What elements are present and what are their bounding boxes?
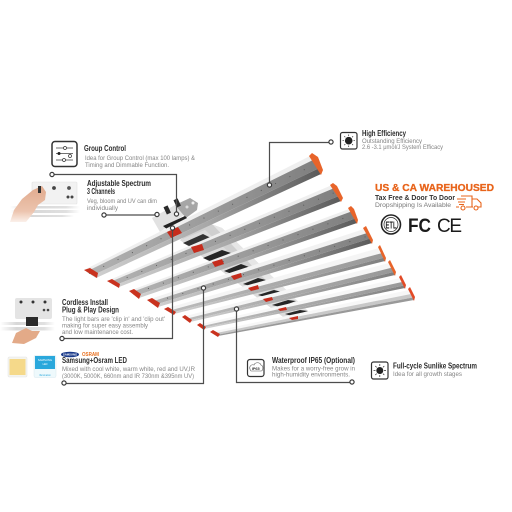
text: high efficiency: 2.6 -3.1 μmol/J System Efficacy <box>362 144 444 151</box>
text: full-cycle spectrum: Idea for all growth stages <box>393 371 463 378</box>
text: group control: Group Control <box>84 144 126 153</box>
icon: Samsung tile: LED <box>43 363 48 366</box>
icon: full-cycle sun <box>372 362 388 379</box>
logo: FCC: FC <box>408 216 431 237</box>
icon: Samsung tile: Illumination <box>39 374 52 377</box>
heading: US and CA warehoused: Dropshipping Is Available <box>375 202 451 209</box>
bar 2 <box>107 183 343 288</box>
text: samsung osram LED: (3000K, 5000K, 660nm and IR 730nm &395nm UV) <box>62 373 194 380</box>
text: high efficiency: High Efficiency <box>362 129 406 138</box>
icon: high efficiency <box>340 132 357 149</box>
text: samsung osram LED <box>62 356 195 380</box>
text: samsung osram LED: Samsung+Osram LED <box>62 356 127 365</box>
bar 1 <box>84 153 323 278</box>
text: cordless install: and low maintenance cost. <box>62 329 133 336</box>
text: group control: Timing and Dimmable Function. <box>85 162 169 169</box>
text: cordless install: Cordless Install <box>62 298 108 307</box>
image: hand on control panel <box>10 182 80 222</box>
text: adjustable spectrum: Veg, bloom and UV can dim <box>87 198 157 205</box>
LED light fixture <box>84 153 415 337</box>
icon: LED chip <box>8 357 27 377</box>
text: cordless install: Plug & Play Design <box>62 306 119 314</box>
text: waterproof: high-humidity environments. <box>272 372 350 378</box>
bar 4 <box>147 226 373 308</box>
heading: US and CA warehoused: US & CA WAREHOUSED <box>375 182 494 194</box>
icon: group control <box>52 142 77 166</box>
logo: ETL: ETL <box>386 220 396 232</box>
text: waterproof <box>272 356 355 378</box>
text: adjustable spectrum: individually <box>87 205 119 212</box>
red clips <box>167 227 298 320</box>
control box <box>152 198 198 232</box>
icon: IP65 waterproof <box>248 360 264 376</box>
bar 5 <box>164 245 386 315</box>
text: waterproof: Waterproof IP65 (Optional) <box>272 356 355 365</box>
text: waterproof: Makes for a worry-free grow in <box>272 366 355 372</box>
text: adjustable spectrum: 3 Channels <box>87 187 115 196</box>
text: adjustable spectrum: Adjustable Spectrum <box>87 179 151 188</box>
logos: Samsung and Osram: SAMSUNG <box>63 352 77 356</box>
text: full-cycle spectrum <box>393 362 477 378</box>
text: group control: Idea for Group Control (max 100 lamps) & <box>85 155 196 162</box>
text: high efficiency <box>362 129 444 151</box>
bar 6 <box>182 260 396 323</box>
bar 8 <box>210 287 415 337</box>
icon: Samsung tile: SAMSUNG <box>38 358 52 362</box>
logo: CE: CE <box>437 216 462 237</box>
bar 3 <box>129 206 358 299</box>
drivers <box>183 234 308 316</box>
icon: IP65 waterproof: IP65 <box>252 367 260 371</box>
icon: delivery truck <box>456 196 481 210</box>
text: cordless install: The light bars are 'clip in' and 'clip out' <box>62 316 165 323</box>
bar 7 <box>197 275 406 330</box>
logos: Samsung and Osram <box>61 352 99 358</box>
icon: Samsung tile <box>34 356 56 378</box>
central spine <box>180 222 312 322</box>
text: cordless install: making for super easy assembly <box>62 322 149 330</box>
text: cordless install <box>62 298 165 336</box>
logo: ETL <box>382 215 400 234</box>
text: group control <box>84 144 196 169</box>
text: adjustable spectrum <box>87 179 157 212</box>
text: samsung osram LED: Mixed with cool white, warm white, red and UV,IR <box>62 366 195 373</box>
logos: Samsung and Osram: OSRAM <box>82 352 99 358</box>
text: full-cycle spectrum: Full-cycle Sunlike Spectrum <box>393 362 477 370</box>
image: hand clipping plug <box>0 298 55 344</box>
text: high efficiency: Outstanding Efficiency <box>362 138 423 145</box>
heading: US and CA warehoused: Tax Free & Door To Door <box>375 195 455 202</box>
heading: US and CA warehoused <box>375 182 494 209</box>
callout lines and dots <box>50 140 354 385</box>
